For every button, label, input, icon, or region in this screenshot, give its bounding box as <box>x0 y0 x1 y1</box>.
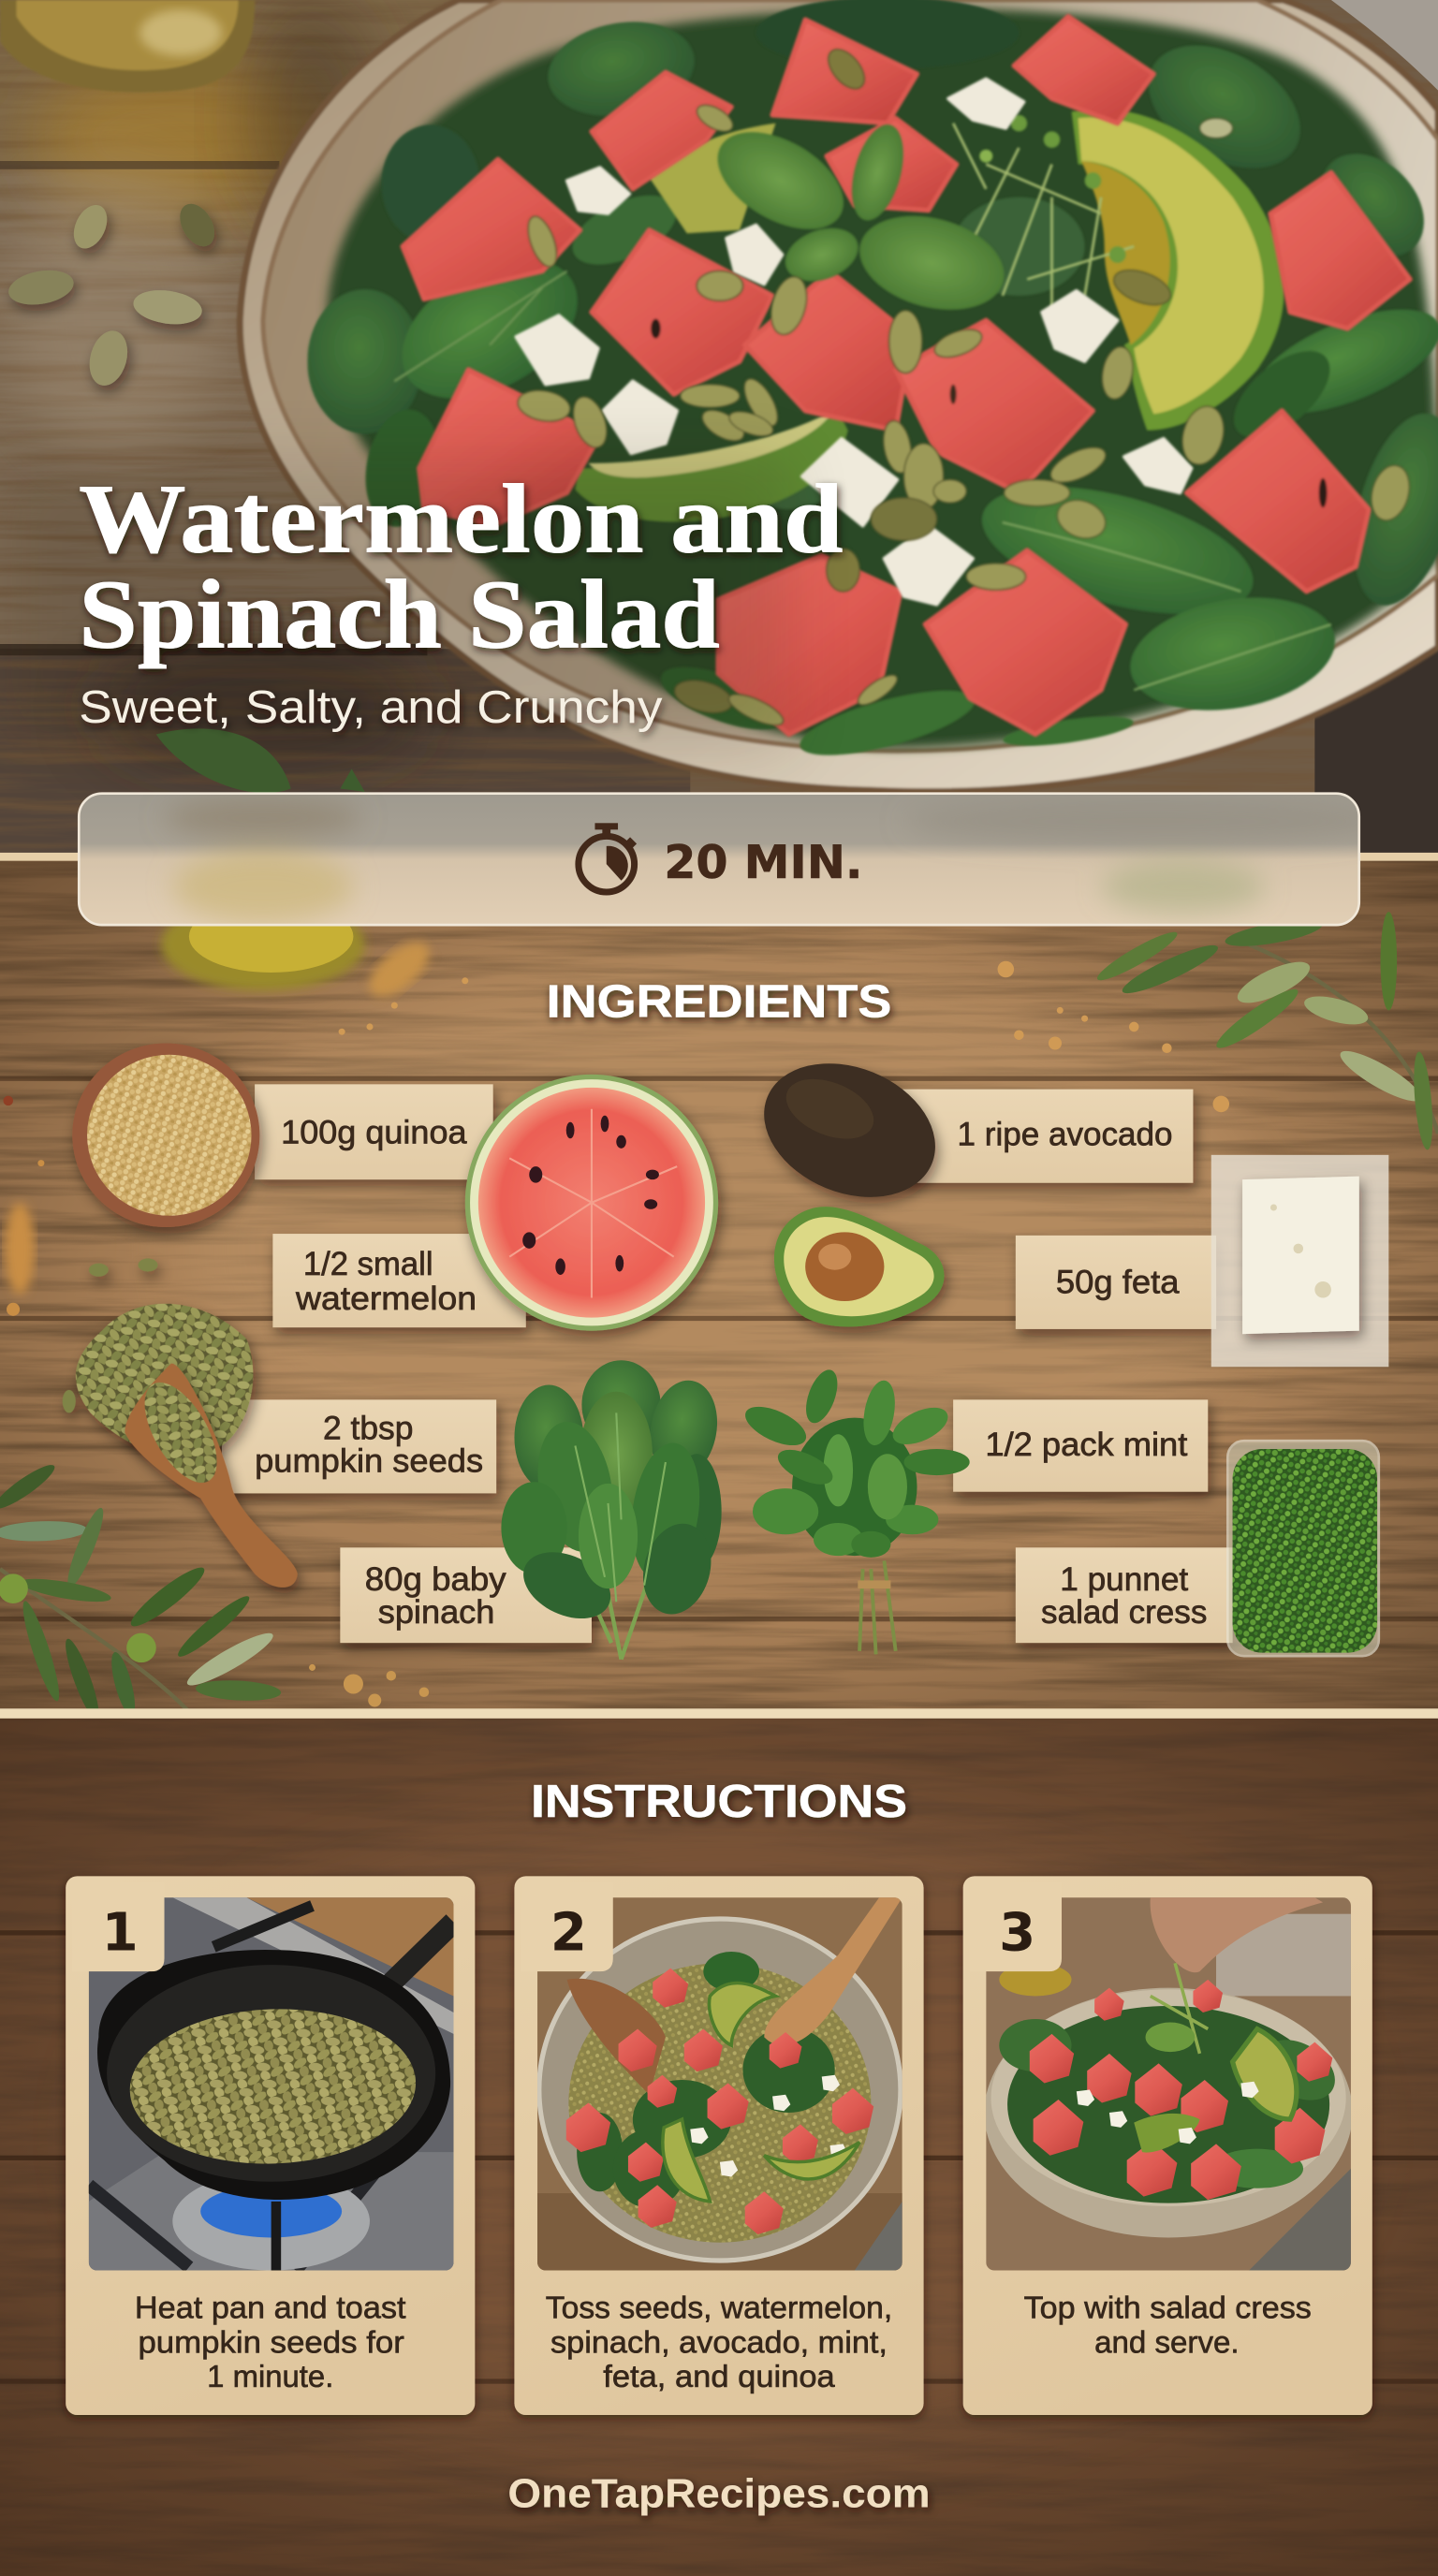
step number tab 2 <box>521 1882 613 1971</box>
mint bunch <box>740 1366 970 1654</box>
subtitle: Sweet, Salty, and Crunchy <box>79 682 663 733</box>
step 1 text: pumpkin seeds for <box>138 2325 404 2360</box>
label: salad cress: 1 punnet <box>1060 1561 1188 1598</box>
step 1 text <box>135 2291 406 2394</box>
title: Watermelon and <box>79 464 844 574</box>
scattered pumpkin seeds <box>6 198 222 389</box>
feta block on paper <box>1211 1155 1388 1367</box>
small mint leaf on table <box>156 728 365 793</box>
step 1 photo: pan on stove <box>89 1897 453 2271</box>
step number tab 2: 2 <box>550 1902 587 1963</box>
step 3 text: and serve. <box>1094 2325 1240 2360</box>
label: mint: 1/2 pack mint <box>985 1427 1188 1463</box>
spinach leaves <box>307 0 1438 768</box>
step 2 text: feta, and quinoa <box>603 2360 835 2394</box>
step 2 photo: glass bowl tossing <box>537 1897 902 2271</box>
label: watermelon: watermelon <box>295 1281 477 1317</box>
title <box>79 464 844 669</box>
label: pumpkin seeds: 2 tbsp <box>323 1410 413 1446</box>
step number tab 1: 1 <box>102 1902 139 1963</box>
step 2 text: spinach, avocado, mint, <box>550 2325 888 2360</box>
step 3 photo: finished bowl with hand <box>985 1897 1353 2271</box>
label: watermelon <box>272 1234 526 1327</box>
time text: 20 MIN. <box>664 835 863 889</box>
left spice crumbs <box>4 1096 44 1316</box>
instructions section background <box>0 1708 1438 2576</box>
watermelon half <box>465 1075 718 1331</box>
label: pumpkin seeds <box>222 1399 496 1493</box>
wooden scoop <box>125 1364 298 1588</box>
ingredients section background <box>0 853 1438 1712</box>
label: pumpkin seeds: pumpkin seeds <box>255 1443 483 1480</box>
label: mint <box>953 1399 1208 1492</box>
section heading: ingredients: INGREDIENTS <box>547 976 891 1027</box>
olive branch bottom left <box>0 1459 429 1722</box>
label: avocado <box>901 1090 1193 1183</box>
label: salad cress: salad cress <box>1041 1594 1207 1631</box>
card: step 1 <box>66 1876 475 2415</box>
hero section <box>0 0 1438 862</box>
salad bowl <box>240 0 1438 792</box>
step 2 text <box>546 2291 892 2394</box>
whole avocado <box>744 1039 955 1222</box>
watermelon cubes <box>403 17 1410 735</box>
step number tab 3 <box>970 1882 1062 1971</box>
step 3 text: Top with salad cress <box>1024 2291 1312 2325</box>
feta crumbles <box>516 79 1192 605</box>
mint and microgreens <box>716 114 1135 311</box>
label: baby spinach: 80g baby <box>365 1561 506 1598</box>
avocado half <box>774 1207 945 1326</box>
label: watermelon: 1/2 small <box>303 1246 433 1282</box>
pumpkin seeds on salad <box>516 43 1415 731</box>
card: step 3 <box>963 1876 1372 2415</box>
label: 100g quinoa: 100g quinoa <box>281 1115 467 1151</box>
step number tab 3: 3 <box>999 1902 1035 1963</box>
hero darken under title <box>0 460 789 748</box>
glass of oil <box>0 0 255 93</box>
avocado slices <box>575 109 1284 522</box>
section heading: instructions: INSTRUCTIONS <box>531 1777 907 1827</box>
label: salad cress <box>1016 1547 1233 1643</box>
label: feta <box>1016 1236 1216 1329</box>
footer website: OneTapRecipes.com <box>507 2470 931 2516</box>
label: baby spinach: spinach <box>378 1594 494 1631</box>
oil bottle and spice crumbs <box>161 899 1229 1112</box>
step 1 text: Heat pan and toast <box>135 2291 406 2325</box>
step number tab 1 <box>72 1882 165 1971</box>
quinoa bowl <box>72 1043 259 1227</box>
label: feta: 50g feta <box>1056 1264 1180 1300</box>
step 2 text: Toss seeds, watermelon, <box>546 2291 892 2325</box>
pumpkin seed pile <box>63 1258 253 1456</box>
step 1 text: 1 minute. <box>207 2360 333 2394</box>
hero wood table background <box>0 0 1438 862</box>
baby spinach bunch <box>501 1360 725 1660</box>
label: avocado: 1 ripe avocado <box>958 1116 1172 1152</box>
cress punnet <box>1227 1441 1379 1656</box>
step 3 text <box>1024 2291 1312 2360</box>
time bar <box>79 794 1397 925</box>
title: Spinach Salad <box>79 560 720 669</box>
olive branch top right <box>1093 912 1438 1150</box>
stopwatch icon <box>579 823 635 892</box>
card: step 2 <box>514 1876 924 2415</box>
label: baby spinach <box>340 1547 592 1643</box>
label: 100g quinoa <box>255 1084 493 1179</box>
